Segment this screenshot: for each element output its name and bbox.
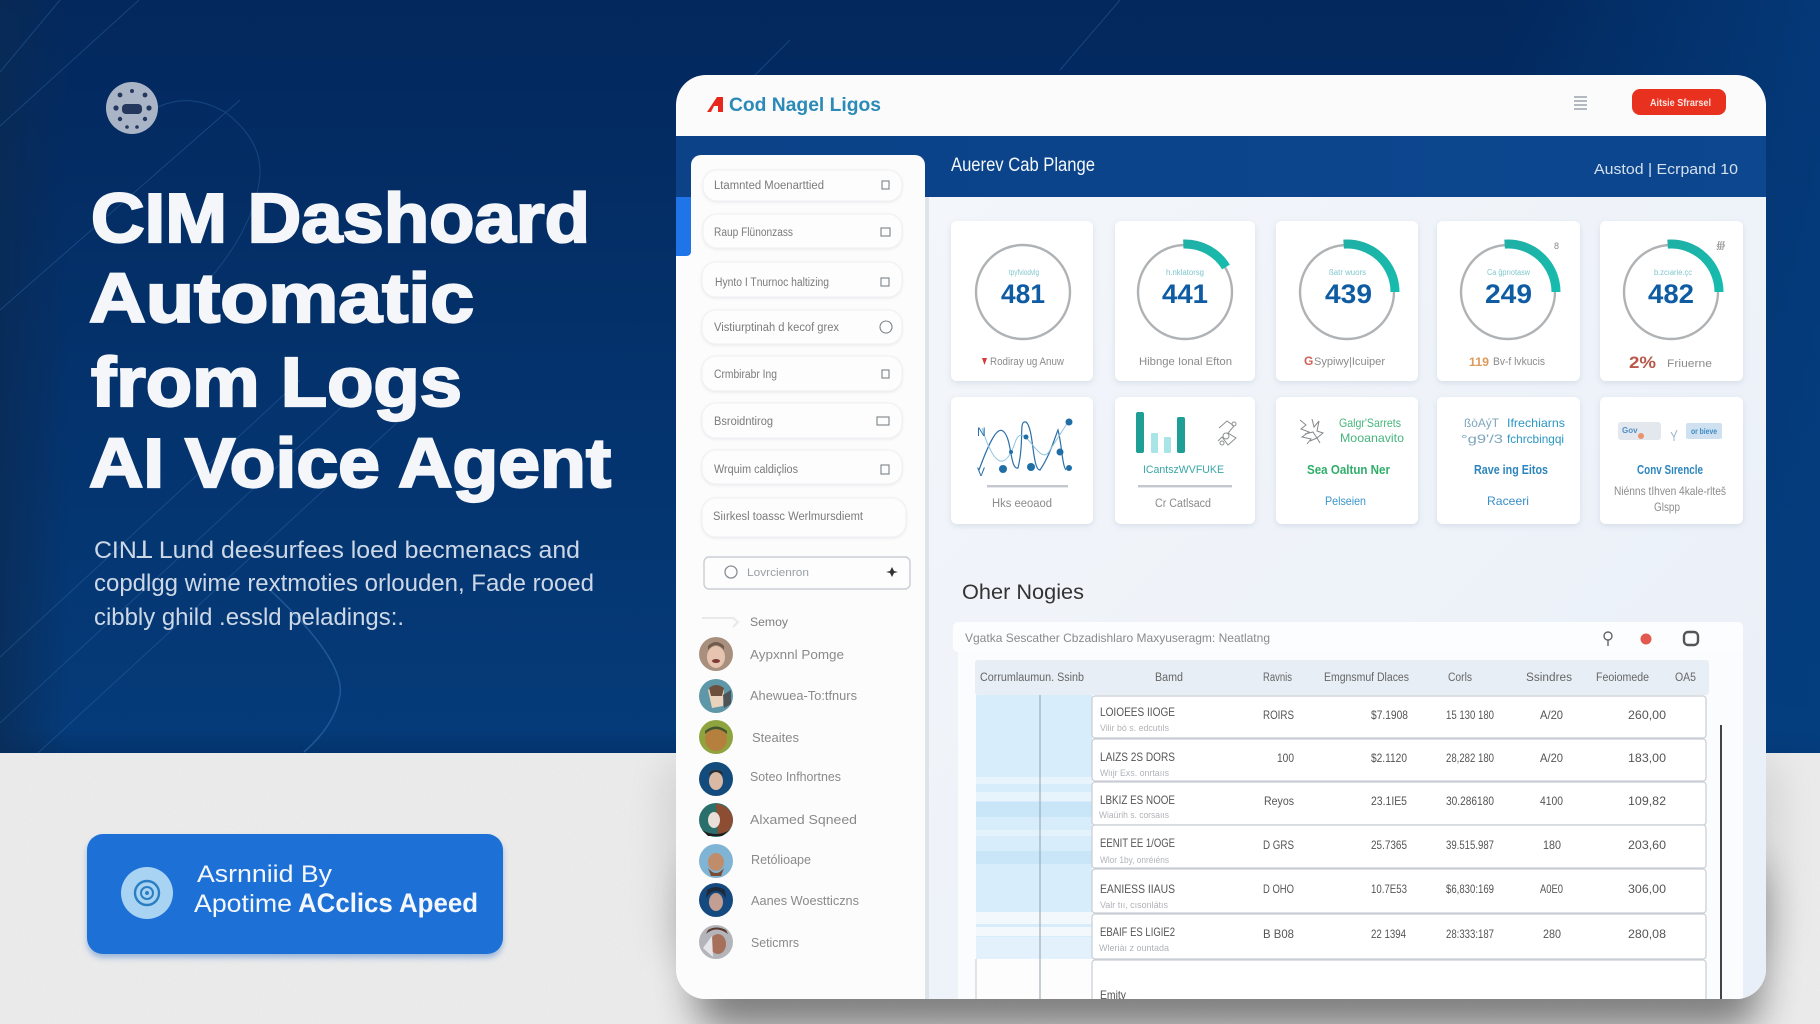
table row subtitles: Wiaürih s. corsaııs <box>1099 810 1169 821</box>
gauge card 4: 119 <box>1469 355 1489 369</box>
title: from Logs <box>91 343 462 421</box>
table row text: 280,08 <box>1628 927 1666 941</box>
table row text: Reyos <box>1264 794 1294 808</box>
gauge card 5 <box>1600 221 1743 381</box>
table row text: A0E0 <box>1540 882 1563 896</box>
chart card: bars <box>1115 397 1255 524</box>
badge: assisted by <box>87 834 503 954</box>
table row text: 203,60 <box>1628 838 1666 852</box>
gauge card 1: tpyfviodvlg <box>1009 268 1039 277</box>
table row text: 183,00 <box>1628 751 1666 765</box>
people heading: Semoy <box>750 615 788 629</box>
title <box>89 179 611 502</box>
text card: blue: Rave ing Eitos <box>1474 463 1548 477</box>
gauge card 3: ßatr wuors <box>1329 268 1366 277</box>
description text <box>94 537 594 631</box>
table row text: LAIZS 2S DORS <box>1100 750 1175 764</box>
table row text: Emity <box>1100 988 1126 1002</box>
table row subtitles: Vilir bò s. edcutıls <box>1100 723 1169 734</box>
people names: Steaites <box>752 730 799 745</box>
people names: Aypxnnl Pomge <box>750 647 844 662</box>
text card: green: Mooanavito <box>1340 431 1404 445</box>
gauge card 5: ∰ <box>1716 240 1726 250</box>
table row text: 180 <box>1543 838 1561 852</box>
table row text: 260,00 <box>1628 708 1666 722</box>
title: AI Voice Agent <box>89 424 611 502</box>
chart card: wave: V <box>977 465 985 479</box>
table row text: 306,00 <box>1628 882 1666 896</box>
table header: Corrumlaumun. Ssinb <box>980 672 1084 684</box>
table header <box>975 660 1709 695</box>
text card: green <box>1276 397 1418 524</box>
gauge card 4: Ca ğprıotasw <box>1487 268 1530 277</box>
gauge card 3 <box>1276 221 1418 381</box>
table row text: 25.7365 <box>1371 838 1407 852</box>
main content background <box>925 197 1766 999</box>
badge text: Asrnniid By <box>197 861 332 888</box>
table row subtitles: Wleriàı z ountada <box>1099 943 1170 954</box>
badge text <box>194 861 478 918</box>
nav labels: Wrquim caldiçlios <box>714 464 798 476</box>
nav labels: Ltamnted Moenarttied <box>714 180 824 192</box>
people names: Retólioape <box>751 852 811 867</box>
panel: sidebar <box>676 155 929 1015</box>
people names: Soteo Infhortnes <box>750 769 841 784</box>
description text: copdlgg wime rextmoties orlouden, Fade rooed <box>94 570 594 597</box>
table row text: LBKIZ ES NOOE <box>1100 793 1175 807</box>
gauge card 5: Friuerne <box>1667 358 1712 370</box>
table row text <box>1100 705 1666 1002</box>
title: Automatic <box>89 259 474 337</box>
gauge card 3: Sypiwy|Icuiper <box>1314 356 1385 368</box>
search box: Lovrcienron <box>747 567 809 579</box>
table row subtitles: Wiıjr Exs. onrtaııs <box>1100 768 1169 779</box>
table header: OA5 <box>1675 672 1696 684</box>
nav labels: Vistiurptinah d kecof grex <box>714 322 839 334</box>
gauge card 5: 482 <box>1648 279 1694 309</box>
nav labels: Hynto I Tnurnoc haltizing <box>715 277 829 289</box>
table row text: ROIRS <box>1263 708 1294 722</box>
table row text: B B08 <box>1263 927 1294 941</box>
nav items <box>702 170 906 537</box>
icon: badge emblem <box>121 867 173 919</box>
table row text: 30.286180 <box>1446 794 1494 808</box>
active nav indicator <box>676 197 691 256</box>
gauge card 4: 249 <box>1485 279 1532 309</box>
chart card: wave: N <box>977 425 986 439</box>
table row subtitles: Wlor 1by, onréıéns <box>1100 855 1169 866</box>
gauge card 4: Bv-f lvkucis <box>1493 356 1545 368</box>
table row text: 10.7E53 <box>1371 882 1407 896</box>
table row text: EENIT EE 1/OGE <box>1100 836 1175 850</box>
gauge card 5: b.zcıarie.çc <box>1654 268 1692 277</box>
gauge card 3: G <box>1304 354 1313 368</box>
table row text: 4100 <box>1540 794 1563 808</box>
table toolbar <box>953 622 1743 652</box>
avatars <box>699 637 733 959</box>
table left colour column <box>976 695 1092 999</box>
gauge card 3: 439 <box>1325 279 1372 309</box>
table header: Bamd <box>1155 672 1183 684</box>
table row text: D GRS <box>1263 838 1294 852</box>
search box <box>704 557 910 589</box>
table header: Emgnsmuf Dlaces <box>1324 672 1409 684</box>
gauge card 1: Rodiray ug Anuw <box>990 356 1064 368</box>
badge text: ACclics Apeed <box>298 888 478 918</box>
table row text: 15 130 180 <box>1446 708 1494 722</box>
text card: pills: Glspp <box>1654 500 1680 514</box>
gauge card 1 <box>951 221 1093 381</box>
text card: green: Pelseien <box>1325 494 1366 508</box>
badge text: Apotime <box>194 890 292 918</box>
table scrollbar <box>1720 725 1722 999</box>
people heading <box>702 617 788 628</box>
people names <box>750 647 859 950</box>
people names: Alxamed Sqneed <box>750 812 857 827</box>
table row text: 39.515.987 <box>1446 838 1494 852</box>
text card: blue: °g9'/3 <box>1461 432 1503 446</box>
nav labels: Crmbirabr Ing <box>714 369 777 381</box>
page bar title: Auerev Cab Plange <box>951 155 1095 176</box>
table row text: 280 <box>1543 927 1561 941</box>
nav labels <box>713 180 864 523</box>
table row text: 28:333:187 <box>1446 927 1494 941</box>
table row text: $7.1908 <box>1371 708 1408 722</box>
icon: circular logo <box>106 82 158 134</box>
chart card: bars: ICantszWVFUKE <box>1143 464 1224 476</box>
panel: dashboard window <box>676 75 1766 1020</box>
table toolbar: Vgatka Sescather Cbzadishlaro Maxyuseragm: Neatlatng <box>965 631 1270 645</box>
text card: blue: ßòAýT <box>1464 416 1500 430</box>
gauge card 2: 441 <box>1162 279 1208 309</box>
table row text: $6,830:169 <box>1446 882 1494 896</box>
chart card: wave: Hks eeoaod <box>992 498 1052 510</box>
table header: Corls <box>1448 672 1472 684</box>
text card: blue: fchrcbingqi <box>1507 432 1564 446</box>
text card: blue: Raceeri <box>1487 494 1529 508</box>
gauge card 4: 8 <box>1554 241 1559 251</box>
table row text: D OHO <box>1263 882 1294 896</box>
table row text: 23.1IE5 <box>1371 794 1407 808</box>
table row text: EANIESS IIAUS <box>1100 882 1175 896</box>
text card: blue <box>1437 397 1580 524</box>
table row text: 22 1394 <box>1371 927 1406 941</box>
table row text: A/20 <box>1540 708 1563 722</box>
gauge card 2: h.nklatorsg <box>1166 268 1204 277</box>
icon: header list <box>1574 97 1587 109</box>
description text: CINꓕ Lund deesurfees loed becmenacs and <box>94 537 580 564</box>
page bar right label: Austod | Ecrpand 10 <box>1594 161 1738 178</box>
button: red action <box>1632 89 1726 115</box>
text card: pills: Niénns tIhven 4kale-rlteš <box>1614 484 1726 498</box>
table row subtitles: Valr tıı, cısonlátıs <box>1100 900 1168 911</box>
table header: Ravnis <box>1263 672 1292 684</box>
card drop shadow <box>664 760 1778 1024</box>
table rows <box>1092 696 1706 1020</box>
table row text: 109,82 <box>1628 794 1666 808</box>
panel: data table <box>953 622 1743 1020</box>
gauge card 4 <box>1437 221 1580 381</box>
table row text: 28,282 180 <box>1446 751 1494 765</box>
nav labels: Raup Flünonzass <box>714 227 793 239</box>
text card: pills: Gov <box>1622 426 1638 435</box>
text card: pills: Conv Sırencle <box>1637 463 1703 477</box>
nav labels: Siırkesl toassc Werlmursdiemt <box>713 511 864 523</box>
gauge card 2 <box>1115 221 1255 381</box>
text card: green: Galgr'Sarrets <box>1339 416 1401 430</box>
title: CIM Dashoard <box>91 179 590 257</box>
table header: Feoiomede <box>1596 672 1649 684</box>
background: blue upper area <box>0 0 1820 753</box>
gauge card 1: 481 <box>1001 279 1045 309</box>
text card: pills: or bieve <box>1691 427 1717 436</box>
people names: Aanes Woestticzns <box>751 893 859 908</box>
text card: blue: Ifrechiarns <box>1507 416 1565 430</box>
gauge card 5: 2% <box>1629 353 1656 372</box>
text card: green: Sea Oaltun Ner <box>1307 463 1390 477</box>
table header: Ssindres <box>1526 672 1572 684</box>
table row text: 100 <box>1277 751 1294 765</box>
description text: cibbly ghild .essld peladings:. <box>94 604 404 631</box>
people names: Ahewuea-To:tfnurs <box>750 688 857 703</box>
chart card: wave <box>951 397 1093 524</box>
table row subtitles <box>1099 723 1170 954</box>
table row text: A/20 <box>1540 751 1563 765</box>
nav labels: Bsroidntirog <box>714 416 773 428</box>
section heading: Oher Nogies <box>962 581 1084 604</box>
people names: Seticmrs <box>751 935 799 950</box>
table row text: LOIOEES IIOGE <box>1100 705 1175 719</box>
header logo: Cod Nagel Ligos <box>729 95 881 116</box>
blue page bar <box>676 136 1766 197</box>
gauge card 2: Hibnge Ional Efton <box>1139 356 1232 368</box>
table row text: $2.1120 <box>1371 751 1407 765</box>
text card: pills <box>1600 397 1743 524</box>
table row text: EBAIF ES LIGIE2 <box>1100 925 1175 939</box>
chart card: bars: Cr Catlsacd <box>1155 498 1211 510</box>
nav icons <box>877 181 892 474</box>
button: red action: Aitsie Sfrarsel <box>1650 97 1711 109</box>
